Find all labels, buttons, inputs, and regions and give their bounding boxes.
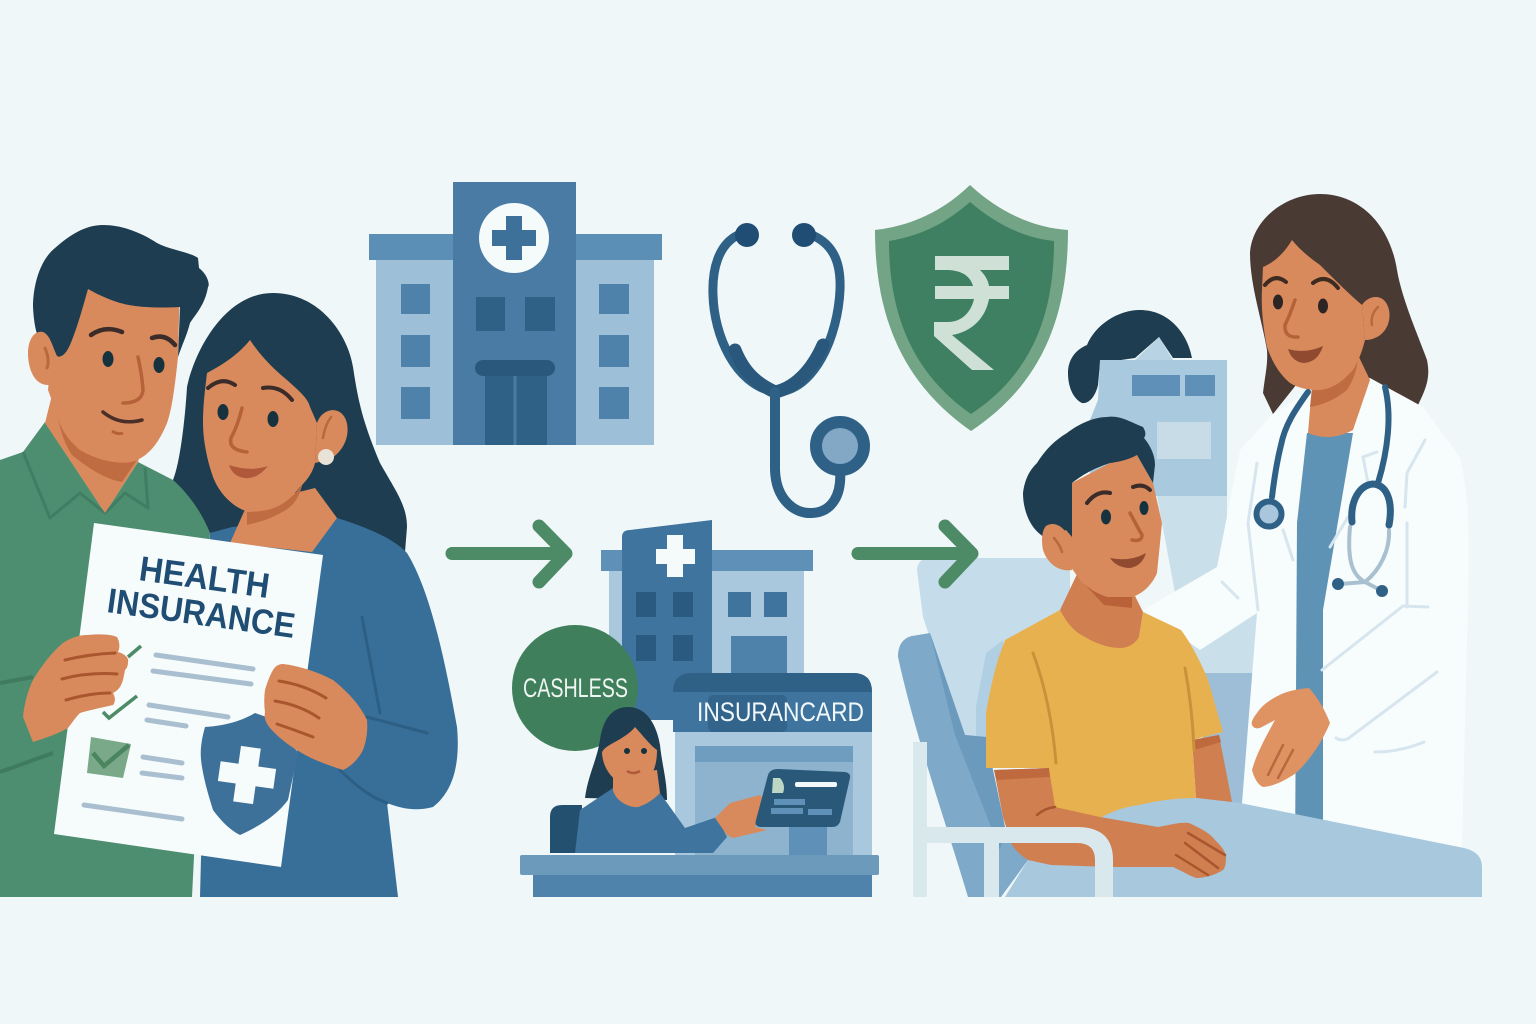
woman's neck <box>230 488 337 552</box>
doctor's coat folds <box>1222 440 1437 752</box>
woman's sweater folds <box>340 617 427 803</box>
doctor's ear <box>1362 297 1390 340</box>
pale wall behind doctor's arm <box>1157 496 1260 673</box>
patient's ear <box>1042 524 1072 570</box>
checklist lines <box>84 655 253 819</box>
small hospital wings <box>609 570 804 720</box>
man's ear <box>28 332 62 385</box>
receptionist <box>550 707 767 853</box>
small hospital tower <box>622 520 712 720</box>
man's face <box>48 280 180 463</box>
doctor's scrubs <box>1295 433 1353 860</box>
nurse and monitor in background <box>1068 310 1260 810</box>
man's hair <box>33 225 209 357</box>
patient's facial features <box>1087 486 1150 568</box>
patient <box>986 417 1232 830</box>
patient's face <box>1060 455 1162 597</box>
side wings <box>376 258 654 445</box>
rupee shield <box>875 185 1068 431</box>
monitor <box>1090 360 1227 496</box>
cross badge <box>479 203 549 273</box>
man's shirt folds <box>0 677 53 772</box>
man's neck <box>45 395 140 513</box>
windows <box>401 284 629 419</box>
shield with cross <box>201 713 298 835</box>
checklist ticks <box>103 646 141 718</box>
patient's right arm <box>1192 735 1232 802</box>
woman's hand <box>264 664 367 770</box>
patient's bed and chair <box>898 558 1070 897</box>
blanket on the bed <box>913 742 1482 897</box>
central tower <box>453 182 576 445</box>
woman's facial features <box>208 381 292 478</box>
document title: INSURANCE <box>105 581 297 646</box>
insurance card kiosk <box>673 673 872 857</box>
bed rail <box>913 742 1113 897</box>
patient's t-shirt <box>986 610 1223 830</box>
rupee symbol <box>934 256 1009 370</box>
doctor's coat <box>1143 378 1469 850</box>
doctor's hand <box>1252 688 1330 787</box>
document title <box>105 549 297 646</box>
cashless badge: CASHLESS <box>523 673 628 703</box>
doctor's face <box>1262 240 1365 390</box>
arrow: policy to cashless <box>452 526 566 582</box>
small hospital windows <box>636 592 693 661</box>
nurse's hair <box>1068 310 1192 403</box>
document title: HEALTH <box>137 549 272 606</box>
insurance card <box>756 769 850 827</box>
stethoscope <box>713 223 864 513</box>
entrance <box>485 370 547 445</box>
woman's face <box>203 340 317 512</box>
patient's hair <box>1023 417 1155 538</box>
man's green shirt <box>0 422 210 897</box>
small hospital and insurance desk <box>512 520 879 897</box>
hospital building <box>369 182 662 445</box>
desk <box>520 855 879 875</box>
arrow: cashless to treatment <box>858 526 972 582</box>
insurance document <box>54 523 323 867</box>
man's facial features <box>91 329 175 434</box>
patient's neck <box>1060 570 1143 648</box>
man's collar <box>23 452 148 518</box>
insurance card kiosk: INSURANCARD <box>697 697 864 727</box>
chair cushion <box>976 640 1003 750</box>
chair frame <box>898 633 1028 897</box>
nurse's face gap <box>1135 337 1173 360</box>
man's hand <box>23 634 128 742</box>
couple holding the health insurance document <box>0 225 458 897</box>
woman's hair <box>173 293 407 552</box>
chair headrest <box>917 558 1070 745</box>
doctor <box>1143 194 1469 860</box>
doctor's stethoscope <box>1256 387 1390 597</box>
woman's sweater <box>200 518 458 897</box>
wing roofs <box>369 234 662 260</box>
doctor's facial features <box>1265 278 1338 363</box>
small hospital cross <box>656 535 695 577</box>
woman's ear and earring <box>315 410 348 463</box>
doctor's neck <box>1308 355 1370 437</box>
cashless badge <box>512 625 638 751</box>
patient's arm and hand <box>994 768 1226 878</box>
doctor's hair <box>1250 194 1428 414</box>
